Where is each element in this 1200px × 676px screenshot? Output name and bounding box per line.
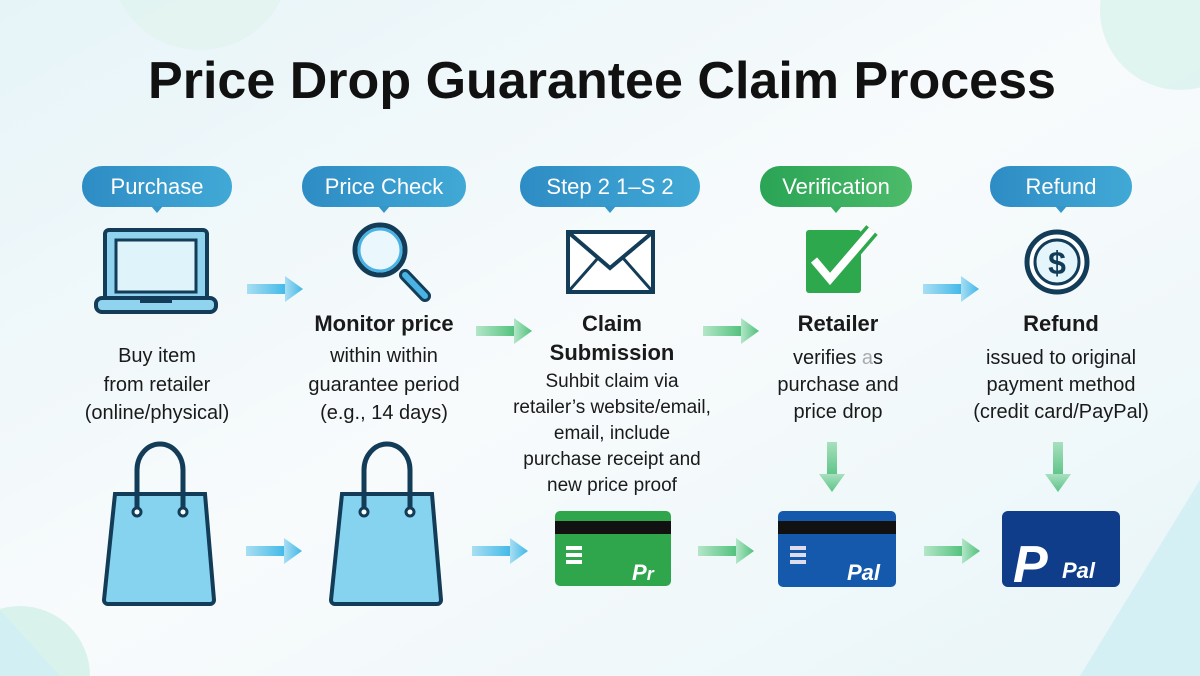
icon: dollar coin: [1027, 232, 1087, 292]
text: refund: Refund: [1023, 311, 1099, 336]
pill: Purchase: [82, 166, 232, 213]
text: price check: guarantee period: [308, 374, 460, 396]
text: refund: issued to original: [986, 347, 1136, 369]
pill: Price Check: Price Check: [325, 174, 444, 199]
title: Price Drop Guarantee Claim Process: [148, 52, 1056, 110]
icon: paypal: [1002, 511, 1120, 594]
text: claim: retailer’s website/email,: [513, 397, 711, 418]
pill: Verification: Verification: [782, 174, 890, 199]
icon: checkbox: [806, 230, 872, 293]
text: retailer: price drop: [794, 401, 882, 423]
text: refund: payment method: [987, 374, 1135, 396]
icon: paypal: Pal: [1062, 558, 1096, 583]
icon: laptop: [96, 230, 216, 312]
text: claim: [513, 311, 711, 496]
text: retailer: Retailer: [798, 311, 879, 336]
icon: dollar coin: $: [1048, 245, 1066, 281]
arrow: row2 2: [472, 538, 528, 564]
text: claim: Claim: [582, 311, 642, 336]
pill: Refund: [990, 166, 1132, 213]
icon: envelope: [568, 232, 653, 292]
icon: paypal: P: [1013, 536, 1048, 594]
icon: green card: [555, 511, 671, 586]
arrow: row1 4: [923, 276, 979, 302]
text: purchase: (online/physical): [85, 402, 229, 424]
arrow: row2 1: [246, 538, 302, 564]
arrow: row2 4: [924, 538, 980, 564]
icon: bag 2: [331, 444, 441, 604]
text: price check: [308, 311, 460, 424]
icon: green card: Pr: [632, 560, 655, 585]
pill: Refund: Refund: [1026, 174, 1096, 199]
text: price check: Monitor price: [314, 311, 454, 336]
text: refund: [973, 311, 1149, 423]
pill: Purchase: Purchase: [111, 174, 203, 199]
text: retailer: verifies as: [793, 347, 883, 369]
icon: magnifier: [355, 225, 425, 296]
pill: Price Check: [302, 166, 466, 213]
text: purchase: Buy item: [118, 345, 196, 367]
text: price check: within within: [329, 345, 438, 367]
pill: Verification: [760, 166, 912, 213]
text: claim: purchase receipt and: [523, 449, 701, 470]
arrow: row2 3: [698, 538, 754, 564]
text: retailer: [777, 311, 899, 423]
text: refund: (credit card/PayPal): [973, 401, 1149, 423]
pill: Step 2: Step 2 1–S 2: [546, 174, 674, 199]
arrow: row1 1: [247, 276, 303, 302]
text: retailer: purchase and: [777, 374, 899, 396]
arrow: row1 3: [703, 318, 759, 344]
text: claim: Suhbit claim via: [545, 371, 679, 392]
arrow: row1 2: [476, 318, 532, 344]
text: claim: Submission: [550, 340, 674, 365]
arrow: down 1: [819, 442, 845, 492]
pill: Step 2: [520, 166, 700, 213]
text: purchase: [85, 345, 229, 424]
icon: bag 1: [104, 444, 214, 604]
text: purchase: from retailer: [104, 374, 211, 396]
icon: blue card: [778, 511, 896, 587]
text: price check: (e.g., 14 days): [320, 402, 448, 424]
text: claim: new price proof: [547, 475, 678, 496]
arrow: down 2: [1045, 442, 1071, 492]
text: claim: email, include: [554, 423, 670, 444]
icon: blue card: Pal: [847, 560, 881, 585]
